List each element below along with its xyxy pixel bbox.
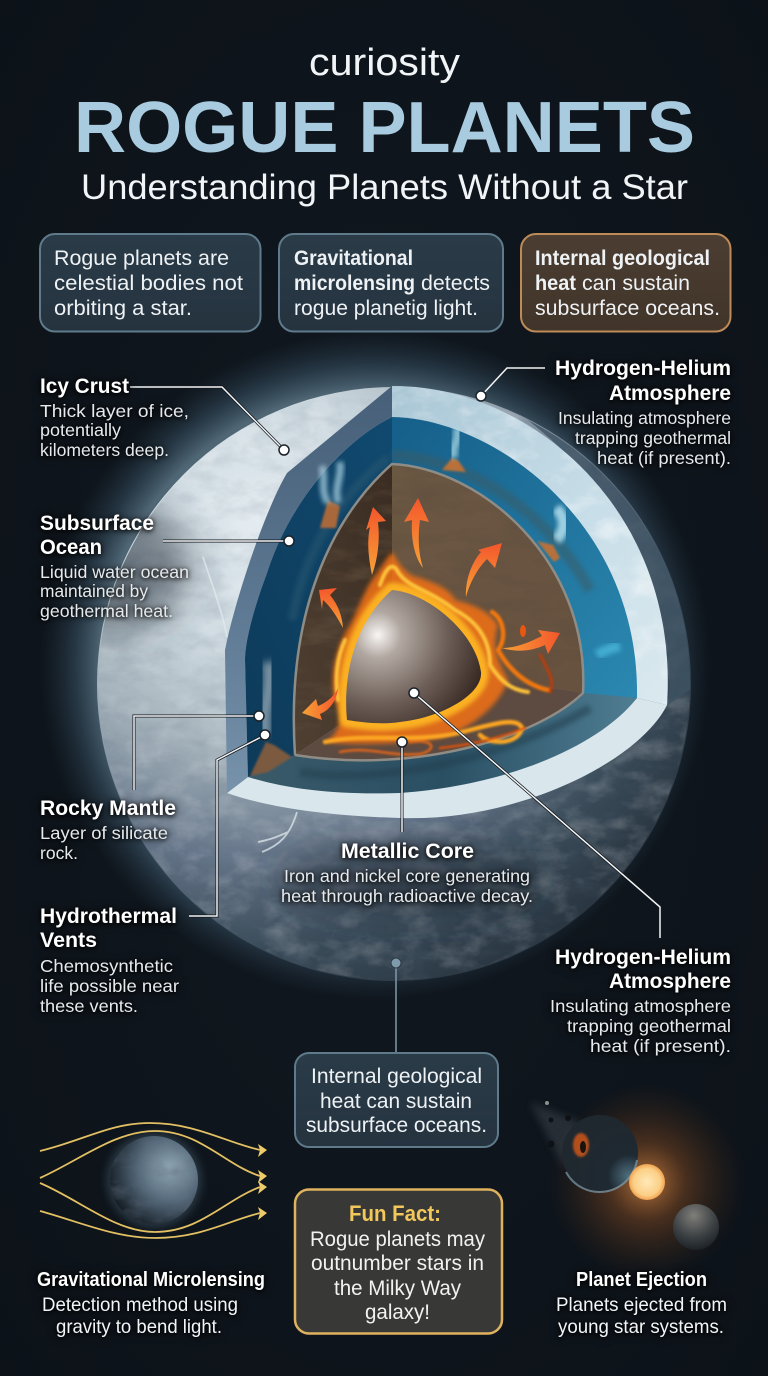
label: metallic core: heat through radioactive decay.	[281, 886, 533, 906]
hydrothermal vents and plumes	[250, 428, 620, 776]
caption: planet ejection: young star systems.	[558, 1316, 724, 1338]
label: hydrogen-helium atmosphere top: Hydrogen-Helium	[555, 356, 731, 380]
label: icy crust: potentially	[40, 420, 121, 440]
planet cutaway diagram	[40, 330, 728, 1000]
callout line: hydrothermal vents	[189, 730, 270, 916]
callout box: internal heat: subsurface oceans.	[306, 1113, 487, 1137]
icon: ejected planet	[562, 1115, 638, 1192]
panel: fun fact	[295, 1190, 502, 1334]
label: icy crust	[40, 374, 189, 460]
subtitle: Understanding Planets Without a Star	[81, 168, 688, 207]
label: hydrothermal vents: life possible near	[40, 976, 179, 996]
callout line: subsurface ocean	[163, 536, 294, 546]
label: hydrogen-helium atmosphere lower: trapping geothermal	[567, 1016, 731, 1036]
label: hydrothermal vents: these vents.	[40, 996, 138, 1016]
diagram: gravitational microlensing	[40, 1123, 267, 1238]
label: icy crust: kilometers deep.	[40, 440, 169, 460]
panel: definition: celestial bodies not	[54, 271, 243, 295]
subsurface ocean	[245, 417, 637, 793]
callout box: internal heat: Internal geological	[311, 1064, 482, 1088]
label: subsurface ocean: Liquid water ocean	[40, 562, 189, 582]
panel: internal heat: can sustain	[582, 271, 690, 295]
label: subsurface ocean: Subsurface	[40, 511, 154, 535]
panel: detection: Gravitational	[294, 246, 413, 270]
label: hydrothermal vents: Hydrothermal	[40, 904, 177, 928]
icon: debris trail	[530, 1101, 580, 1168]
label: rocky mantle: Layer of silicate	[40, 823, 168, 843]
label: subsurface ocean: maintained by	[40, 581, 148, 601]
title: Rogue Planets: ROGUE PLANETS	[74, 88, 695, 168]
caption: planet ejection	[556, 1269, 727, 1338]
light paths	[40, 1123, 260, 1238]
panel: fun fact: galaxy!	[365, 1300, 430, 1324]
callout line: metallic core	[397, 737, 407, 832]
label: rocky mantle	[40, 796, 176, 863]
arrowheads	[258, 1144, 267, 1220]
panel: fun fact: Rogue planets may	[310, 1227, 485, 1251]
label: hydrogen-helium atmosphere top: Insulating atmosphere	[558, 408, 731, 428]
callout box: internal heat: heat can sustain	[320, 1089, 472, 1113]
rocky mantle	[290, 464, 587, 760]
panel: detection	[279, 234, 503, 332]
label: hydrogen-helium atmosphere top: heat (if present).	[597, 448, 731, 468]
icy crust shell	[225, 386, 672, 818]
panel: detection: microlensing	[294, 271, 415, 295]
callout line: rocky mantle	[134, 711, 264, 790]
label: subsurface ocean	[40, 511, 189, 621]
panel: fun fact: Fun Fact:	[349, 1201, 441, 1226]
panel: internal heat: Internal geological	[535, 246, 710, 270]
label: metallic core	[281, 839, 533, 906]
caption: gravitational microlensing: Detection method using	[42, 1294, 238, 1316]
callout line: lower info box	[391, 958, 401, 1053]
molten layer and flames	[325, 552, 552, 755]
diagram: planet ejection	[530, 1084, 745, 1280]
label: hydrogen-helium atmosphere lower: Insulating atmosphere	[550, 996, 731, 1016]
label: icy crust: Thick layer of ice,	[40, 401, 189, 421]
panel: fun fact: outnumber stars in	[311, 1251, 484, 1275]
label: rocky mantle: Rocky Mantle	[40, 796, 176, 820]
icon: lensing planet	[106, 1132, 202, 1228]
caption: gravitational microlensing	[37, 1269, 265, 1338]
label: metallic core: Iron and nickel core generating	[284, 866, 530, 886]
label: hydrothermal vents: Chemosynthetic	[40, 956, 173, 976]
panel: definition: Rogue planets are	[54, 246, 229, 270]
label: subsurface ocean: Ocean	[40, 535, 102, 559]
panel: definition: orbiting a star.	[54, 296, 192, 320]
label: hydrogen-helium atmosphere top	[555, 356, 731, 468]
label: rocky mantle: rock.	[40, 843, 78, 863]
label: hydrogen-helium atmosphere lower: Hydrogen-Helium	[555, 945, 731, 969]
panel: internal heat: heat	[535, 271, 576, 295]
label: hydrogen-helium atmosphere lower: Atmosphere	[609, 969, 731, 993]
caption: planet ejection: Planet Ejection	[576, 1269, 707, 1291]
label: hydrogen-helium atmosphere top: Atmosphere	[609, 381, 731, 405]
title block	[74, 42, 695, 207]
label: hydrothermal vents	[40, 904, 179, 1016]
label: hydrogen-helium atmosphere top: trapping geothermal	[575, 428, 731, 448]
label: hydrothermal vents: Vents	[40, 928, 97, 952]
caption: gravitational microlensing: gravity to bend light.	[56, 1316, 222, 1338]
callout box: internal heat	[295, 1053, 498, 1147]
label: hydrogen-helium atmosphere lower: heat (if present).	[590, 1036, 731, 1056]
metallic core	[346, 590, 481, 723]
panel: fun fact: the Milky Way	[334, 1276, 461, 1300]
icon: young star	[629, 1164, 665, 1200]
icon: small planet	[673, 1204, 719, 1250]
kicker: curiosity: curiosity	[309, 42, 460, 84]
caption: planet ejection: Planets ejected from	[556, 1294, 727, 1316]
caption: gravitational microlensing: Gravitational Microlensing	[37, 1269, 265, 1291]
panel: internal heat: subsurface oceans.	[535, 296, 720, 320]
panel: definition	[40, 234, 260, 332]
label: icy crust: Icy Crust	[40, 374, 129, 398]
panel: internal heat	[521, 234, 730, 332]
panel: detection: rogue planetig light.	[294, 296, 478, 320]
callout line: icy crust	[130, 387, 289, 455]
callout line: hydrogen-helium top	[476, 368, 545, 401]
label: hydrogen-helium atmosphere lower	[550, 945, 731, 1056]
label: subsurface ocean: geothermal heat.	[40, 601, 173, 621]
heat arrows	[302, 498, 560, 720]
callout line: hydrogen-helium lower	[409, 688, 660, 938]
panel: detection: detects	[421, 271, 490, 295]
label: metallic core: Metallic Core	[341, 839, 474, 863]
